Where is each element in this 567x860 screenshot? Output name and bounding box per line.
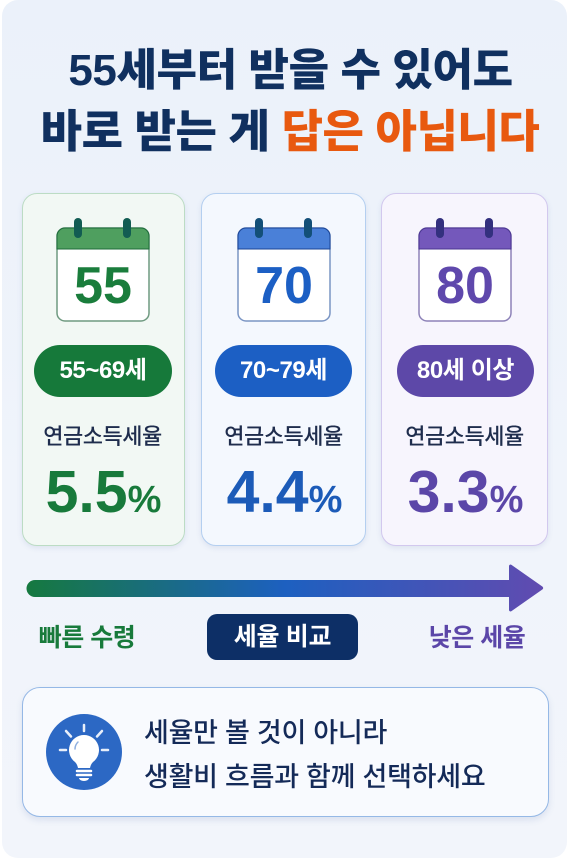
age pill 80+: 80세 이상 <box>417 357 514 384</box>
rate 4.4%: 4.4% <box>227 459 342 525</box>
label 3: 연금소득세율 <box>405 424 524 449</box>
label 1: 연금소득세율 <box>43 424 162 449</box>
age pill 70~79 <box>215 345 352 397</box>
age pill 55~69: 55~69세 <box>59 357 147 384</box>
right arrow label: 낮은 세율 <box>429 624 525 652</box>
title: 55세부터 받을 수 있어도 <box>68 46 513 95</box>
panel: 70~79 <box>201 193 366 546</box>
rate 3.3%: 3.3% <box>408 459 523 525</box>
icon: calendar 55 <box>56 218 150 322</box>
age pill 80+ <box>397 345 534 397</box>
callout text <box>144 718 485 792</box>
icon: calendar 70: 70 <box>255 257 313 315</box>
panel: 55~69 <box>22 193 185 546</box>
center badge: 세율 비교 <box>234 623 331 651</box>
icon: calendar 70 <box>237 218 331 322</box>
title: 바로 받는 게 답은 아닙니다 <box>41 106 539 157</box>
arrow: gradient <box>26 564 544 612</box>
callout text: 생활비 흐름과 함께 선택하세요 <box>144 762 485 792</box>
label 2: 연금소득세율 <box>224 424 343 449</box>
center badge <box>207 614 358 660</box>
age pill 70~79: 70~79세 <box>240 357 327 384</box>
rate 5.5%: 5.5% <box>46 459 161 525</box>
left arrow label: 빠른 수령 <box>39 624 135 652</box>
icon: calendar 80 <box>418 218 512 322</box>
age pill 55~69 <box>34 345 172 397</box>
icon: light bulb <box>46 714 122 790</box>
callout panel <box>22 687 549 817</box>
icon: calendar 80: 80 <box>436 257 494 315</box>
panel: 80+ <box>381 193 548 546</box>
icon: calendar 55: 55 <box>74 257 132 315</box>
callout text: 세율만 볼 것이 아니라 <box>144 718 387 748</box>
title <box>41 46 540 157</box>
